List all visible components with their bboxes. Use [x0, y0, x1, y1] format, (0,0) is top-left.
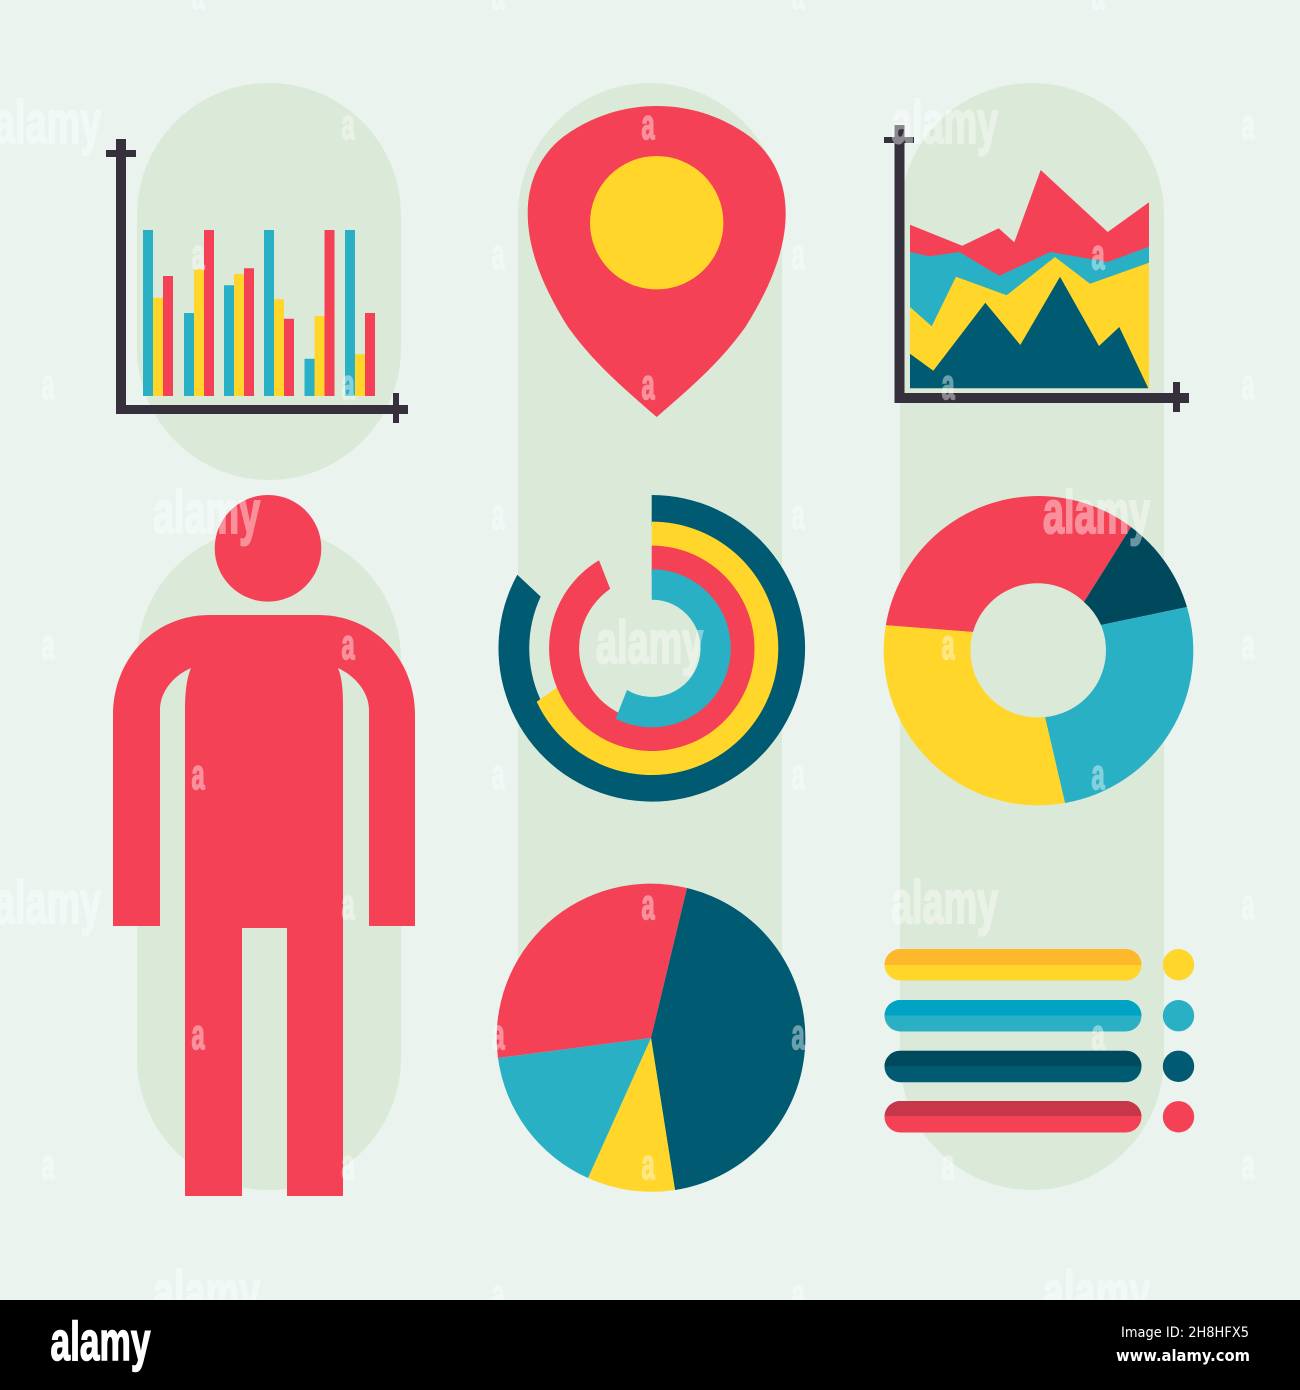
stacked area chart	[884, 125, 1189, 412]
watermarks: aaaa	[42, 622, 1255, 669]
watermarks: aaa	[341, 882, 1255, 929]
watermarks: alamy	[153, 1259, 260, 1326]
watermarks: aaaa	[192, 232, 1105, 279]
bar chart	[106, 139, 408, 423]
watermarks: alamy	[596, 609, 703, 676]
watermarks: aa	[491, 1272, 805, 1319]
watermarks: aaaa	[192, 1012, 1105, 1059]
area chart axes	[884, 125, 1189, 412]
footer logo: alamy	[50, 1310, 151, 1372]
website: www.alamy.com	[1116, 1346, 1250, 1365]
watermarks: alamy	[153, 479, 260, 546]
bar chart axes	[106, 139, 408, 423]
watermarks: alamy	[891, 869, 998, 936]
icon: standing person	[113, 495, 415, 1196]
donut chart	[884, 496, 1193, 805]
watermarks: alamy	[1043, 1259, 1150, 1326]
background pills	[137, 83, 1164, 1190]
legend bars with dots	[884, 949, 1194, 1133]
radial ring chart	[498, 495, 805, 802]
watermarks: aaaaa	[42, 1142, 1255, 1189]
icon: map location pin	[528, 106, 786, 417]
watermarks: aa	[491, 492, 805, 539]
pie chart	[497, 884, 805, 1192]
image id: Image ID: 2H8HFX5	[1121, 1325, 1249, 1341]
watermarks: alamy	[891, 89, 998, 156]
watermarks: alamy	[1043, 479, 1150, 546]
watermarks: aaaa	[192, 752, 1105, 799]
footer bar	[0, 1300, 1300, 1390]
watermarks: aaaaa	[42, 362, 1255, 409]
watermarks: aaa	[341, 102, 1255, 149]
